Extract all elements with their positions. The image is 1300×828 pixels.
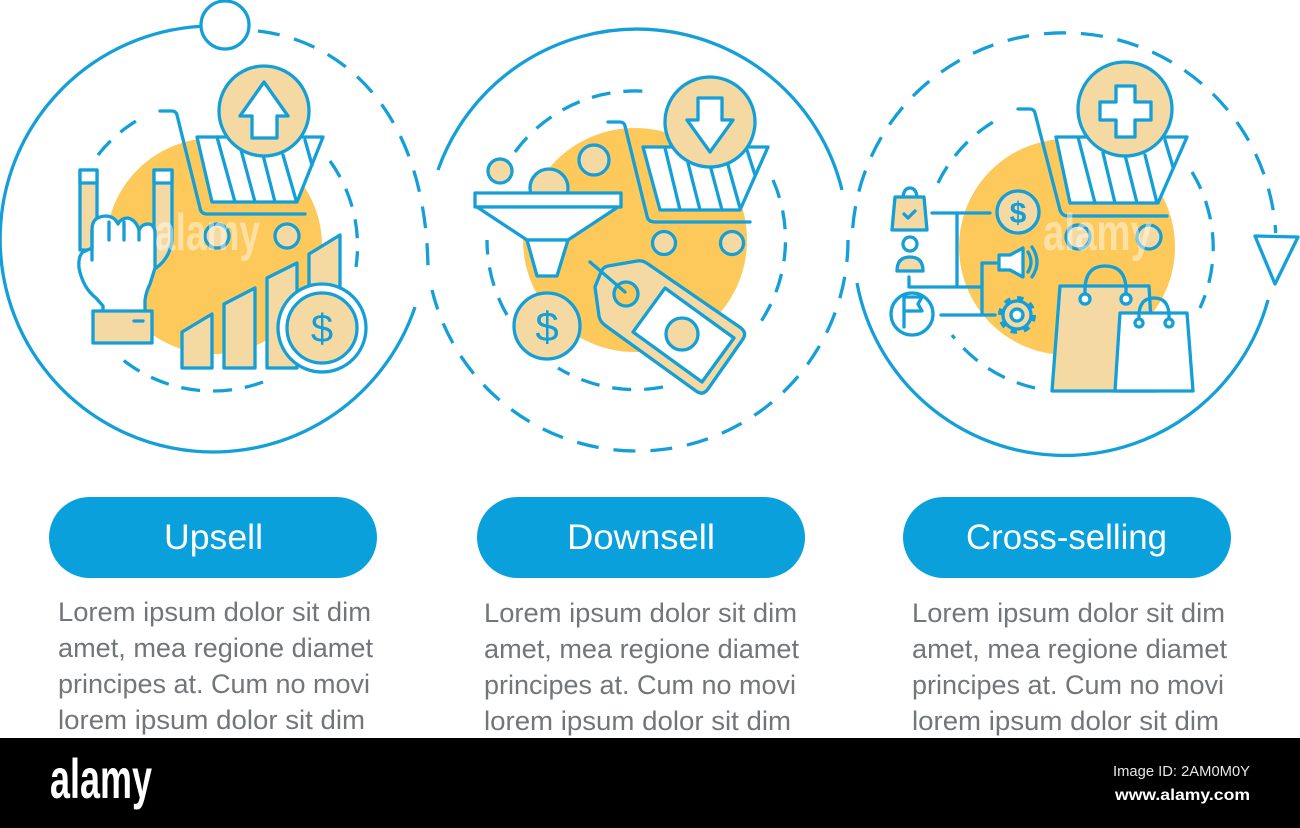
icon: dollar badge bbox=[997, 191, 1039, 233]
icon: shopping cart bbox=[160, 111, 323, 248]
icon: price tag bbox=[590, 261, 745, 393]
footer bar bbox=[0, 738, 1300, 828]
text block: upsell description: lorem ipsum dolor sit dim bbox=[58, 705, 365, 735]
icon: large shopping bag bbox=[1052, 266, 1155, 391]
outer ring, dashed arc bbox=[432, 240, 848, 451]
icon: shopping cart bbox=[1018, 109, 1187, 249]
bar chart: rising bars bbox=[182, 235, 340, 368]
pill heading: Upsell bbox=[49, 497, 377, 578]
text block: cross-selling description: principes at. Cum no movi bbox=[912, 670, 1224, 700]
text block: downsell description: principes at. Cum no movi bbox=[484, 670, 796, 700]
pill heading: Upsell: Upsell bbox=[164, 518, 263, 557]
pill heading: Downsell: Downsell bbox=[567, 518, 715, 557]
text block: downsell description: lorem ipsum dolor sit dim bbox=[484, 706, 791, 736]
text block: downsell description: amet, mea regione diamet bbox=[484, 634, 800, 664]
icon: dollar badge: $ bbox=[1010, 197, 1027, 230]
logo: alamy bbox=[50, 747, 152, 810]
icon: hand gesture bbox=[79, 170, 172, 343]
icon: dollar coin: $ bbox=[535, 303, 559, 350]
image id: Image ID: 2AM0M0Y bbox=[1113, 763, 1250, 780]
outer progress ring, dashed arc bbox=[258, 31, 428, 280]
yellow backdrop circle bbox=[106, 138, 322, 354]
text block: cross-selling description: lorem ipsum dolor sit dim bbox=[912, 706, 1219, 736]
inner dashed ring bbox=[487, 91, 785, 390]
pill heading: Downsell bbox=[477, 497, 805, 578]
outer ring, solid arc bbox=[857, 283, 1268, 455]
icon: shopping cart bbox=[608, 122, 768, 254]
panel: downsell illustration bbox=[432, 29, 848, 451]
watermark: alamy bbox=[1043, 204, 1152, 262]
text block: upsell description: amet, mea regione diamet bbox=[58, 633, 374, 663]
icon: flag badge bbox=[891, 293, 933, 335]
outer progress ring, solid arc bbox=[0, 26, 415, 452]
pill heading: Cross-selling: Cross-selling bbox=[966, 518, 1167, 557]
panel: cross-selling illustration bbox=[853, 33, 1298, 455]
start marker circle bbox=[201, 1, 249, 49]
connector lines bbox=[909, 213, 996, 315]
text block: downsell description bbox=[484, 598, 800, 736]
inner dashed ring bbox=[98, 116, 358, 391]
yellow backdrop circle bbox=[523, 128, 747, 352]
icon: dollar coin bbox=[278, 284, 366, 372]
outer ring, dashed arc bbox=[853, 33, 1276, 233]
website: www.alamy.com bbox=[1114, 787, 1250, 804]
icon: plus badge bbox=[1078, 62, 1172, 156]
text block: upsell description: Lorem ipsum dolor sit dim bbox=[58, 597, 371, 627]
text block: upsell description: principes at. Cum no movi bbox=[58, 669, 370, 699]
icon: dollar coin bbox=[514, 293, 580, 359]
icon: dollar coin: $ bbox=[311, 307, 333, 351]
icon: sales funnel with balls bbox=[475, 145, 621, 276]
text block: upsell description bbox=[58, 597, 374, 735]
panel: upsell illustration bbox=[0, 1, 428, 452]
inner dashed ring bbox=[938, 117, 1213, 388]
outer ring, solid arc bbox=[438, 29, 842, 190]
text block: cross-selling description bbox=[912, 598, 1228, 736]
icon: down arrow badge bbox=[665, 77, 755, 167]
icon: person bbox=[897, 237, 923, 271]
pill heading: Cross-selling bbox=[903, 497, 1231, 578]
arrowhead bbox=[1255, 236, 1298, 284]
icon: up arrow badge bbox=[219, 66, 309, 156]
watermark: alamy bbox=[155, 204, 260, 262]
text block: cross-selling description: Lorem ipsum dolor sit dim bbox=[912, 598, 1225, 628]
icon: speaker bbox=[999, 247, 1037, 277]
icon: small shopping bag bbox=[1115, 298, 1193, 391]
yellow backdrop circle bbox=[959, 139, 1175, 355]
text block: downsell description: Lorem ipsum dolor sit dim bbox=[484, 598, 797, 628]
text block: cross-selling description: amet, mea regione diamet bbox=[912, 634, 1228, 664]
icon: gear bbox=[1001, 299, 1033, 331]
icon: approved bag bbox=[892, 188, 927, 230]
